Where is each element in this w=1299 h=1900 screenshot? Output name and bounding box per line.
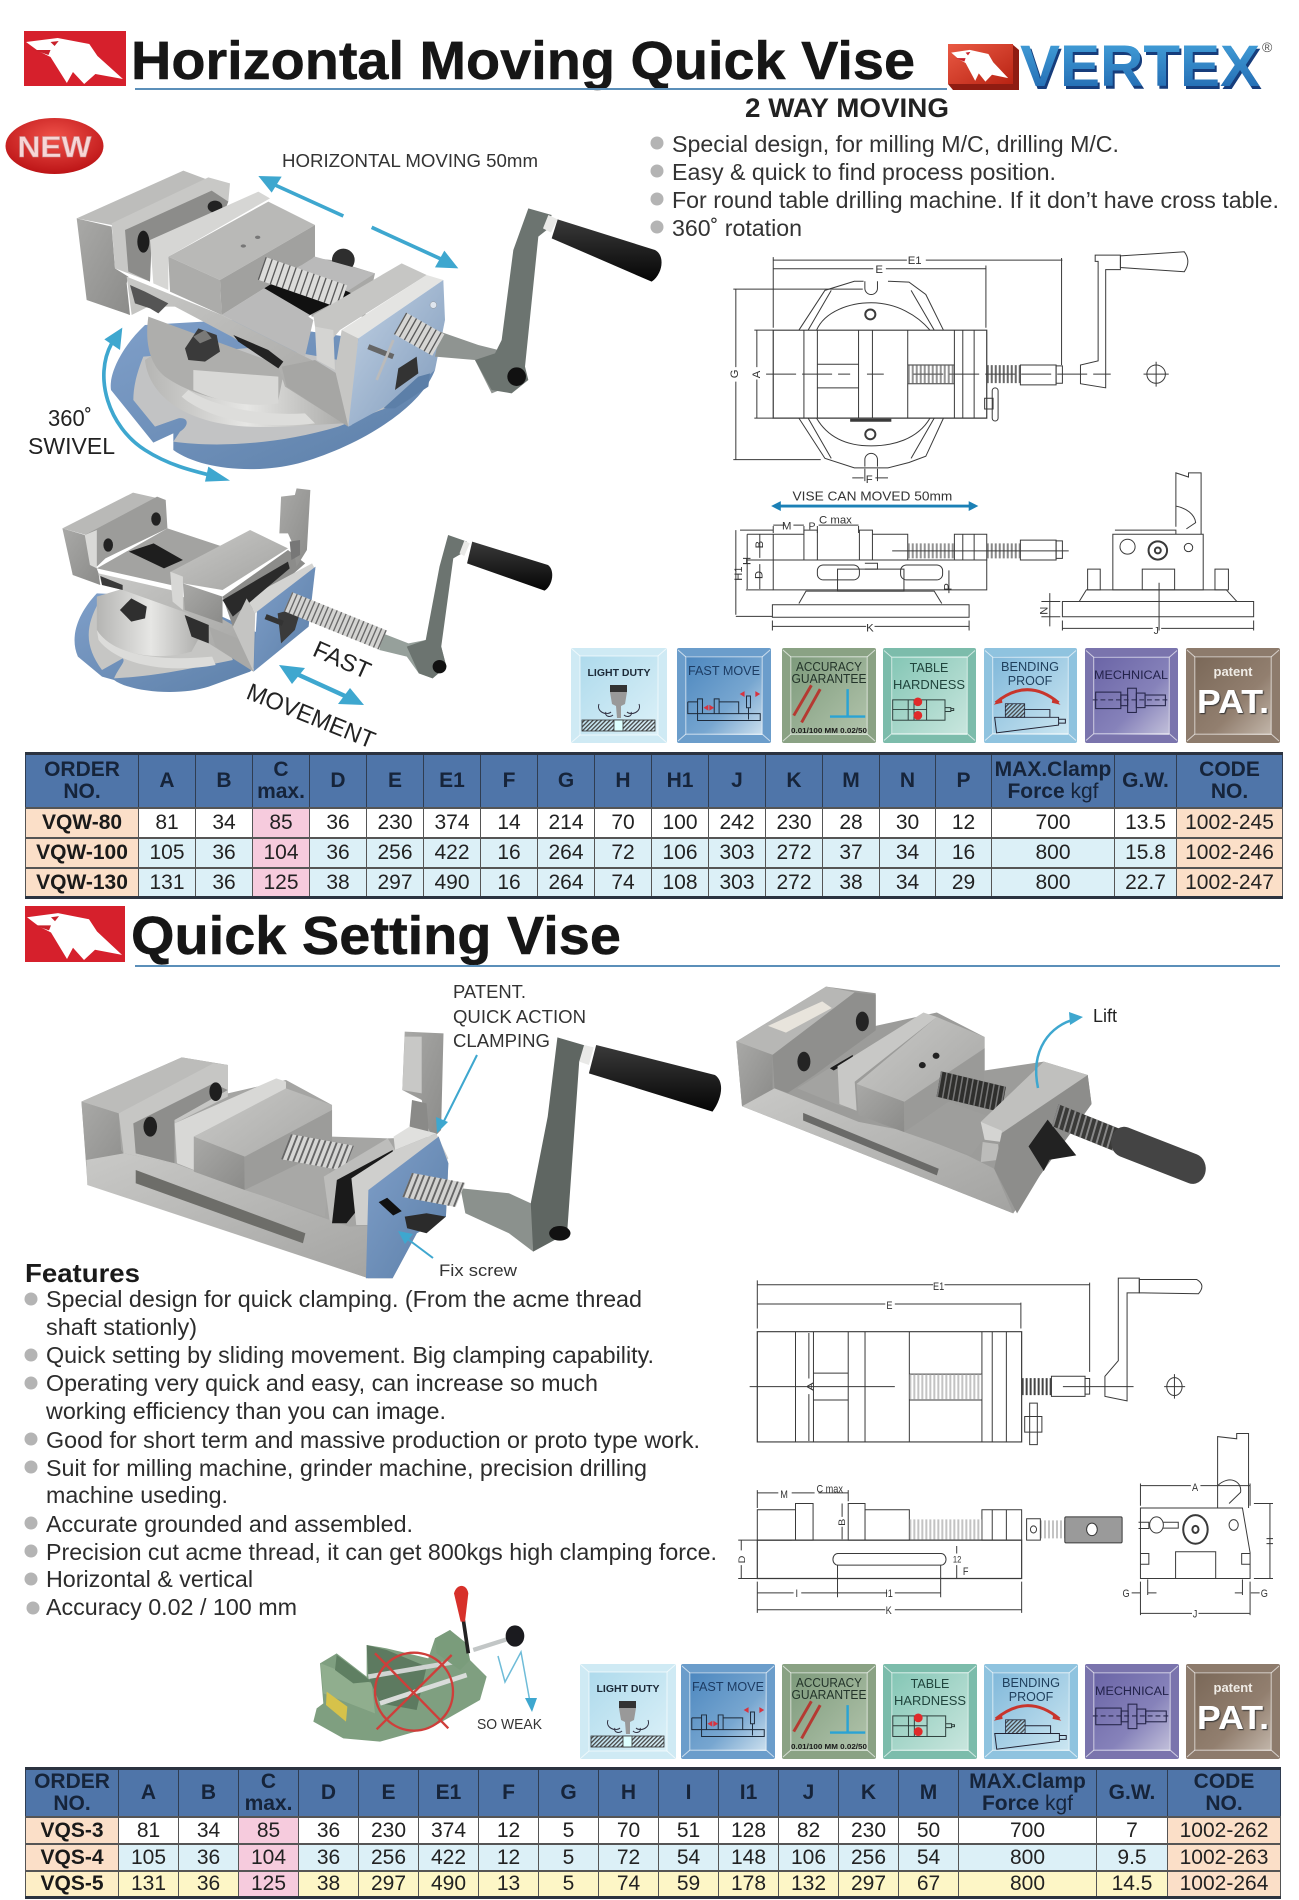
table: VQS specifications: 256 bbox=[851, 1846, 886, 1868]
table: VQS specifications: A bbox=[141, 1781, 156, 1804]
blueprint: side view of quick setting vise bbox=[738, 1484, 1122, 1617]
callout: fix screw bbox=[398, 1231, 518, 1280]
table: VQW specifications: 36 bbox=[212, 871, 236, 894]
table: VQS specifications: 5 bbox=[563, 1846, 574, 1868]
label: 360 swivel: SWIVEL bbox=[28, 433, 115, 459]
table: VQS specifications: 59 bbox=[677, 1872, 700, 1895]
table: VQS specifications: E1 bbox=[436, 1781, 461, 1804]
icon: mechnical: MECHNICAL bbox=[1095, 1686, 1170, 1698]
table: VQS specifications: 67 bbox=[917, 1872, 940, 1895]
blueprint: top view of swivel vise: G bbox=[729, 370, 741, 378]
table: VQS specifications: 5 bbox=[563, 1818, 574, 1842]
table: VQS specifications: 104 bbox=[251, 1846, 286, 1868]
icon: accuracy guarantee bbox=[782, 1664, 876, 1759]
icon: patent: patent bbox=[1214, 1680, 1253, 1695]
table: VQW specifications: 242 bbox=[719, 811, 755, 834]
table: VQS specifications: 12 bbox=[497, 1846, 520, 1868]
table: VQW specifications: 105 bbox=[149, 841, 185, 864]
blueprint: top view of swivel vise bbox=[729, 252, 1188, 486]
table: VQS specifications: H bbox=[621, 1781, 636, 1804]
table: VQS specifications: M bbox=[920, 1781, 937, 1804]
table: VQW specifications: N bbox=[900, 769, 915, 792]
blueprint: top view of swivel vise: A bbox=[751, 370, 763, 378]
icon: table hardness bbox=[883, 1664, 977, 1759]
table: VQS specifications: max. bbox=[245, 1792, 292, 1815]
blueprint: side view of swivel vise: K bbox=[866, 622, 874, 634]
feature list, second section: working efficiency than you can image. bbox=[45, 1398, 446, 1424]
table: VQS specifications: 422 bbox=[431, 1846, 466, 1868]
table: VQS specifications: 148 bbox=[731, 1846, 766, 1868]
table: VQS specifications: K bbox=[861, 1781, 876, 1804]
blueprint: side view of quick setting vise: I bbox=[796, 1588, 798, 1600]
icons row: first section bbox=[571, 648, 1280, 743]
icon: accuracy guarantee: GUARANTEE bbox=[792, 1688, 866, 1702]
blueprint: side view of quick setting vise: D bbox=[738, 1556, 748, 1563]
table: VQS specifications: 128 bbox=[731, 1818, 766, 1842]
table: VQW specifications: 800 bbox=[1035, 841, 1071, 864]
feature list, second section: Good for short term and massive production or proto type work. bbox=[46, 1427, 700, 1453]
icon: light duty bbox=[580, 1664, 676, 1759]
icon: bending proof: BENDING bbox=[1002, 1676, 1060, 1690]
photo: swivel vise, quick lever open bbox=[62, 488, 552, 692]
table: VQS specifications: I1 bbox=[740, 1781, 757, 1804]
blueprint: side view of swivel vise: P bbox=[942, 583, 954, 591]
table: VQW specifications: H1 bbox=[667, 769, 693, 792]
blueprint: side view of quick setting vise: C max bbox=[817, 1484, 843, 1496]
table: VQW specifications: 29 bbox=[952, 871, 975, 894]
table: VQS specifications: 34 bbox=[197, 1818, 220, 1842]
feature list, first section: For round table drilling machine. If it don’t have cross table. bbox=[672, 187, 1279, 213]
photo: quick setting vise with crank bbox=[81, 1032, 721, 1278]
icon: patent: PAT. bbox=[1197, 1699, 1269, 1736]
badge: NEW bbox=[6, 118, 104, 174]
table: VQS specifications: 70 bbox=[617, 1818, 640, 1842]
icon: accuracy guarantee bbox=[782, 648, 876, 743]
table: VQS specifications: 36 bbox=[197, 1846, 220, 1868]
icon: table hardness: TABLE bbox=[911, 1677, 949, 1691]
table: VQW specifications: 36 bbox=[326, 841, 350, 864]
table: VQS specifications: 297 bbox=[371, 1872, 406, 1895]
blueprint: top view of swivel vise: E1 bbox=[908, 255, 922, 267]
table: VQS specifications: 14.5 bbox=[1112, 1872, 1152, 1895]
table: VQS specifications: Force kgf bbox=[982, 1792, 1073, 1815]
blueprint: front view of quick setting vise: J bbox=[1193, 1609, 1197, 1621]
table: VQS specifications: 132 bbox=[791, 1872, 826, 1895]
table: VQS specifications: G bbox=[560, 1781, 577, 1804]
table: VQW specifications: B bbox=[216, 769, 232, 792]
table: VQS specifications: CODE bbox=[1194, 1770, 1254, 1793]
arrow: fast movement double bbox=[279, 665, 364, 705]
brand logo: VERTEX: ® bbox=[1262, 39, 1273, 55]
table: VQS specifications: 38 bbox=[317, 1872, 340, 1895]
table: VQW specifications: 81 bbox=[155, 811, 179, 834]
logo: red eagle, first section bbox=[24, 31, 126, 86]
feature list, second section: Precision cut acme thread, it can get 800kgs high clamping force. bbox=[46, 1539, 717, 1565]
table: VQW specifications: 131 bbox=[149, 871, 185, 894]
table: VQS specifications: G.W. bbox=[1109, 1781, 1155, 1804]
table: VQW specifications: 104 bbox=[263, 841, 299, 864]
dimension callout: vise can moved 50mm bbox=[771, 489, 978, 511]
table: VQW specifications: H bbox=[615, 769, 631, 792]
table: VQS specifications: 230 bbox=[851, 1818, 886, 1842]
table: VQW specifications: 13.5 bbox=[1125, 811, 1166, 834]
dimension callout: vise can moved 50mm: VISE CAN MOVED 50mm bbox=[793, 489, 952, 504]
table: VQW specifications: ORDER bbox=[44, 758, 120, 781]
table: VQS specifications: E bbox=[381, 1781, 396, 1804]
table: VQW specifications: G bbox=[558, 769, 574, 792]
table: VQW specifications: 1002-247 bbox=[1185, 871, 1274, 894]
table: VQS specifications: 297 bbox=[851, 1872, 886, 1895]
icon: bending proof bbox=[984, 648, 1077, 743]
table: VQW specifications: A bbox=[159, 769, 175, 792]
blueprint: front view of quick setting vise: H bbox=[1266, 1537, 1276, 1545]
table: VQW specifications: 74 bbox=[611, 871, 635, 894]
icon: accuracy guarantee: 0.01/100 MM 0.02/50 bbox=[791, 1742, 867, 1751]
table: VQW specifications bbox=[25, 752, 1283, 899]
table: VQW specifications: 38 bbox=[839, 871, 863, 894]
table: VQS specifications: NO. bbox=[1205, 1792, 1243, 1815]
blueprint: front view of quick setting vise: A bbox=[1192, 1482, 1198, 1494]
arrow and label: so weak bbox=[477, 1652, 542, 1733]
icon: light duty: LIGHT DUTY bbox=[596, 1683, 660, 1695]
table: VQS specifications: 256 bbox=[371, 1846, 406, 1868]
icon: fast move bbox=[681, 1664, 775, 1759]
table: VQW specifications: 85 bbox=[269, 811, 293, 834]
table: VQW specifications: 256 bbox=[377, 841, 413, 864]
arrows: horizontal moving bbox=[258, 176, 458, 268]
title: Horizontal Moving Quick Vise: Horizontal Moving Quick Vise bbox=[131, 31, 915, 91]
table: VQW specifications: MAX.Clamp bbox=[995, 758, 1111, 781]
blueprint: side view of quick setting vise: I1 bbox=[885, 1588, 893, 1600]
label: 360 swivel: 360˚ bbox=[48, 405, 92, 431]
logo: red eagle, second section bbox=[25, 906, 125, 962]
table: VQS specifications: 800 bbox=[1010, 1872, 1045, 1895]
table: VQW specifications: 264 bbox=[548, 841, 584, 864]
table: VQW specifications: 38 bbox=[326, 871, 350, 894]
label: 360 swivel bbox=[28, 405, 115, 459]
blueprint: front view of quick setting vise: G bbox=[1261, 1588, 1268, 1600]
icons row: second section bbox=[580, 1664, 1280, 1759]
icon: mechnical bbox=[1085, 648, 1178, 743]
table: VQS specifications: 36 bbox=[317, 1846, 340, 1868]
table: VQW specifications: 36 bbox=[212, 841, 236, 864]
blueprint: front view of swivel vise bbox=[1039, 473, 1254, 637]
table: VQW specifications: 15.8 bbox=[1125, 841, 1166, 864]
table: VQW specifications: 30 bbox=[896, 811, 919, 834]
table: VQS specifications: 800 bbox=[1010, 1846, 1045, 1868]
table: VQW specifications: 303 bbox=[719, 871, 755, 894]
feature list, first section bbox=[650, 131, 1279, 241]
blueprint: top view of swivel vise: F bbox=[866, 474, 873, 486]
table: VQS specifications: 490 bbox=[431, 1872, 466, 1895]
table: VQS specifications: 82 bbox=[797, 1818, 820, 1842]
feature list, second section: Special design for quick clamping. (From the acme thread bbox=[46, 1286, 642, 1312]
feature list, second section: Quick setting by sliding movement. Big clamping capability. bbox=[46, 1342, 654, 1368]
table: VQW specifications: 36 bbox=[326, 811, 350, 834]
table: VQW specifications: 16 bbox=[497, 871, 521, 894]
table: VQS specifications: 374 bbox=[431, 1818, 466, 1842]
feature list, first section: Special design, for milling M/C, drilling M/C. bbox=[672, 131, 1119, 157]
icon: accuracy guarantee: 0.01/100 MM 0.02/50 bbox=[791, 726, 867, 735]
label: fast: FAST bbox=[309, 636, 375, 685]
icon: mechnical: MECHNICAL bbox=[1094, 670, 1169, 682]
blueprint: top view of quick setting vise bbox=[750, 1278, 1202, 1445]
photo: swivel vise with handle bbox=[77, 171, 662, 469]
icon: accuracy guarantee: ACCURACY bbox=[796, 660, 863, 674]
icon: mechnical bbox=[1085, 1664, 1179, 1759]
feature list, second section: machine useding. bbox=[46, 1482, 228, 1508]
table: VQS specifications: 36 bbox=[317, 1818, 340, 1842]
table: VQW specifications: 34 bbox=[896, 871, 919, 894]
table: VQS specifications: 5 bbox=[563, 1872, 574, 1895]
icon: bending proof: PROOF bbox=[1008, 674, 1053, 688]
table: VQW specifications: M bbox=[842, 769, 860, 792]
table: VQS specifications: VQS-3 bbox=[40, 1818, 104, 1842]
icon: accuracy guarantee: ACCURACY bbox=[796, 1676, 863, 1690]
table: VQW specifications: 70 bbox=[611, 811, 635, 834]
table: VQW specifications: 34 bbox=[896, 841, 919, 864]
table: VQS specifications: F bbox=[502, 1781, 515, 1804]
icon: table hardness: HARDNESS bbox=[893, 678, 965, 692]
feature list, second section: Operating very quick and easy, can increase so much bbox=[46, 1370, 598, 1396]
table: VQS specifications: MAX.Clamp bbox=[969, 1770, 1086, 1793]
table: VQW specifications: 34 bbox=[212, 811, 236, 834]
table: VQS specifications: D bbox=[321, 1781, 336, 1804]
table: VQS specifications: 85 bbox=[257, 1818, 280, 1842]
table: VQW specifications: 72 bbox=[611, 841, 635, 864]
icon: fast move bbox=[677, 648, 771, 743]
table: VQW specifications: 28 bbox=[839, 811, 863, 834]
icon: fast move: FAST MOVE bbox=[688, 664, 760, 678]
table: VQW specifications: 1002-246 bbox=[1185, 841, 1274, 864]
table: VQW specifications: 14 bbox=[497, 811, 521, 834]
blueprint: front view of quick setting vise bbox=[1122, 1433, 1276, 1621]
icon: patent bbox=[1186, 1664, 1280, 1759]
blueprint: side view of swivel vise: B bbox=[754, 541, 766, 548]
feature list, second section bbox=[24, 1286, 717, 1620]
callout: fix screw: Fix screw bbox=[439, 1261, 518, 1280]
table: VQW specifications: 1002-245 bbox=[1185, 811, 1274, 834]
table: VQS specifications: 106 bbox=[791, 1846, 826, 1868]
table: VQW specifications: 272 bbox=[776, 841, 812, 864]
table: VQS specifications bbox=[25, 1767, 1281, 1899]
icon: fast move: FAST MOVE bbox=[692, 1680, 764, 1694]
icon: patent bbox=[1186, 648, 1280, 743]
table: VQW specifications: NO. bbox=[63, 780, 101, 803]
blueprint: front view of quick setting vise: G bbox=[1122, 1588, 1130, 1600]
feature list, second section: Suit for milling machine, grinder machine, precision drilling bbox=[46, 1455, 647, 1481]
table: VQS specifications: 131 bbox=[131, 1872, 166, 1895]
table: VQS specifications: 51 bbox=[677, 1818, 700, 1842]
blueprint: side view of swivel vise: P bbox=[809, 521, 816, 532]
feature list, first section: 360˚ rotation bbox=[672, 215, 802, 241]
table: VQW specifications: C bbox=[273, 758, 289, 781]
feature list, second section: shaft stationly) bbox=[46, 1314, 197, 1340]
table: VQS specifications: 72 bbox=[617, 1846, 640, 1868]
table: VQW specifications: VQW-80 bbox=[42, 811, 122, 834]
table: VQW specifications: VQW-130 bbox=[36, 871, 128, 894]
table: VQW specifications: VQW-100 bbox=[36, 841, 128, 864]
callout: patent quick action clamping: PATENT. bbox=[453, 982, 526, 1002]
blueprint: side view of swivel vise: M bbox=[782, 520, 792, 532]
table: VQW specifications: 214 bbox=[548, 811, 584, 834]
table: VQS specifications: ORDER bbox=[34, 1770, 110, 1793]
table: VQW specifications: 700 bbox=[1035, 811, 1071, 834]
icon: bending proof: PROOF bbox=[1009, 1690, 1054, 1704]
feature list, second section: Accuracy 0.02 / 100 mm bbox=[46, 1594, 297, 1620]
table: VQS specifications: 12 bbox=[497, 1818, 520, 1842]
table: VQS specifications: C bbox=[261, 1770, 276, 1793]
photo: quick setting vise with knob bbox=[736, 987, 1193, 1213]
blueprint: side view of swivel vise: H bbox=[741, 557, 754, 565]
arrow and label: so weak: SO WEAK bbox=[477, 1716, 542, 1733]
table: VQS specifications: 7 bbox=[1126, 1818, 1138, 1842]
table: VQW specifications: G.W. bbox=[1122, 769, 1169, 792]
label: horizontal moving: HORIZONTAL MOVING 50mm bbox=[282, 151, 538, 171]
table: VQW specifications: 12 bbox=[952, 811, 975, 834]
icon: patent: PAT. bbox=[1197, 683, 1269, 720]
blueprint: top view of swivel vise: E bbox=[875, 264, 883, 276]
table: VQS specifications: 178 bbox=[731, 1872, 766, 1895]
arrow and label: lift: Lift bbox=[1093, 1006, 1117, 1026]
photo: competitor green vise crossed out bbox=[313, 1586, 524, 1742]
heading: Features: Features bbox=[25, 1258, 140, 1288]
table: VQS specifications: 125 bbox=[251, 1872, 286, 1895]
table: VQS specifications: 50 bbox=[917, 1818, 940, 1842]
subtitle: 2 WAY MOVING: 2 WAY MOVING bbox=[745, 93, 949, 123]
table: VQW specifications: 264 bbox=[548, 871, 584, 894]
table: VQW specifications: F bbox=[503, 769, 515, 792]
blueprint: front view of swivel vise: N bbox=[1039, 607, 1051, 615]
callout: patent quick action clamping bbox=[436, 982, 586, 1133]
table: VQS specifications: 81 bbox=[137, 1818, 160, 1842]
table: VQW specifications: CODE bbox=[1199, 758, 1260, 781]
blueprint: side view of swivel vise: H1 bbox=[733, 566, 745, 581]
callout: patent quick action clamping: CLAMPING bbox=[453, 1031, 550, 1051]
table: VQS specifications: NO. bbox=[53, 1792, 91, 1815]
badge: NEW: NEW bbox=[18, 131, 92, 164]
table: VQS specifications: I bbox=[686, 1781, 691, 1804]
table: VQW specifications: NO. bbox=[1211, 780, 1248, 803]
table: VQS specifications: 230 bbox=[371, 1818, 406, 1842]
blueprint: side view of quick setting vise: K bbox=[886, 1605, 892, 1617]
blueprint: top view of quick setting vise: A bbox=[806, 1382, 816, 1391]
table: VQW specifications: 16 bbox=[952, 841, 975, 864]
table: VQS specifications: 105 bbox=[131, 1846, 166, 1868]
blueprint: front view of swivel vise: J bbox=[1154, 626, 1159, 637]
icon: light duty bbox=[571, 648, 667, 743]
table: VQW specifications: Force kgf bbox=[1007, 780, 1099, 803]
icon: bending proof: BENDING bbox=[1001, 660, 1059, 674]
blueprint: side view of quick setting vise: F bbox=[963, 1566, 968, 1578]
blueprint: side view of quick setting vise: B bbox=[838, 1518, 848, 1526]
table: VQW specifications: 106 bbox=[662, 841, 698, 864]
table: VQS specifications: 13 bbox=[497, 1872, 520, 1895]
table: VQW specifications: E1 bbox=[439, 769, 465, 792]
table: VQS specifications: B bbox=[201, 1781, 216, 1804]
brand logo: VERTEX: VERTEX bbox=[1020, 34, 1260, 99]
icon: table hardness: TABLE bbox=[910, 661, 948, 675]
table: VQW specifications: 297 bbox=[377, 871, 413, 894]
blueprint: side view of swivel vise bbox=[733, 515, 1069, 634]
table: VQW specifications: P bbox=[956, 769, 970, 792]
table: VQW specifications: 22.7 bbox=[1125, 871, 1166, 894]
table: VQS specifications: 1002-263 bbox=[1180, 1846, 1268, 1868]
icon: light duty: LIGHT DUTY bbox=[588, 667, 650, 679]
icon: bending proof bbox=[984, 1664, 1078, 1759]
table: VQS specifications: 74 bbox=[617, 1872, 640, 1895]
table: VQS specifications: 9.5 bbox=[1117, 1846, 1147, 1868]
label: movement: MOVEMENT bbox=[243, 678, 379, 755]
table: VQW specifications: 490 bbox=[434, 871, 470, 894]
table: VQW specifications: 37 bbox=[839, 841, 863, 864]
table: VQS specifications: J bbox=[803, 1781, 814, 1804]
icon: patent: patent bbox=[1214, 664, 1253, 679]
table: VQS specifications: 54 bbox=[917, 1846, 940, 1868]
icon: accuracy guarantee: GUARANTEE bbox=[792, 672, 866, 686]
blueprint: top view of quick setting vise: E bbox=[886, 1300, 893, 1312]
callout: patent quick action clamping: QUICK ACTION bbox=[453, 1007, 586, 1027]
table: VQS specifications: 1002-262 bbox=[1180, 1818, 1268, 1842]
table: VQW specifications: K bbox=[786, 769, 802, 792]
feature list, first section: Easy & quick to find process position. bbox=[672, 159, 1056, 185]
table: VQW specifications: J bbox=[731, 769, 743, 792]
table: VQS specifications: 1002-264 bbox=[1180, 1872, 1268, 1895]
arrow and label: lift bbox=[1036, 1006, 1117, 1088]
table: VQS specifications: 700 bbox=[1010, 1818, 1045, 1842]
icon: table hardness bbox=[883, 648, 976, 743]
table: VQW specifications: D bbox=[330, 769, 346, 792]
table: VQW specifications: 800 bbox=[1035, 871, 1071, 894]
table: VQW specifications: 230 bbox=[776, 811, 812, 834]
table: VQW specifications: 125 bbox=[263, 871, 299, 894]
blueprint: side view of swivel vise: D bbox=[754, 571, 766, 579]
blueprint: side view of quick setting vise: 12 bbox=[953, 1554, 962, 1565]
blueprint: side view of quick setting vise: M bbox=[780, 1490, 788, 1501]
arrow: 360 swivel arc bbox=[104, 328, 230, 482]
table: VQW specifications: 272 bbox=[776, 871, 812, 894]
table: VQS specifications: VQS-4 bbox=[40, 1846, 104, 1868]
blueprint: side view of swivel vise: C max bbox=[819, 515, 852, 526]
feature list, second section: Accurate grounded and assembled. bbox=[46, 1511, 413, 1537]
table: VQW specifications: 16 bbox=[497, 841, 521, 864]
blueprint: top view of quick setting vise: E1 bbox=[933, 1282, 945, 1293]
table: VQS specifications: 54 bbox=[677, 1846, 700, 1868]
table: VQS specifications: 36 bbox=[197, 1872, 220, 1895]
table: VQW specifications: 108 bbox=[662, 871, 698, 894]
icon: table hardness: HARDNESS bbox=[894, 1694, 966, 1708]
feature list, second section: Horizontal & vertical bbox=[46, 1566, 253, 1592]
table: VQS specifications: VQS-5 bbox=[40, 1872, 104, 1895]
table: VQW specifications: 422 bbox=[434, 841, 470, 864]
table: VQW specifications: 100 bbox=[662, 811, 698, 834]
table: VQW specifications: 374 bbox=[434, 811, 470, 834]
title: Quick Setting Vise: Quick Setting Vise bbox=[131, 906, 621, 966]
table: VQW specifications: 303 bbox=[719, 841, 755, 864]
table: VQW specifications: E bbox=[388, 769, 402, 792]
table: VQW specifications: 230 bbox=[377, 811, 413, 834]
table: VQW specifications: max. bbox=[257, 780, 305, 803]
